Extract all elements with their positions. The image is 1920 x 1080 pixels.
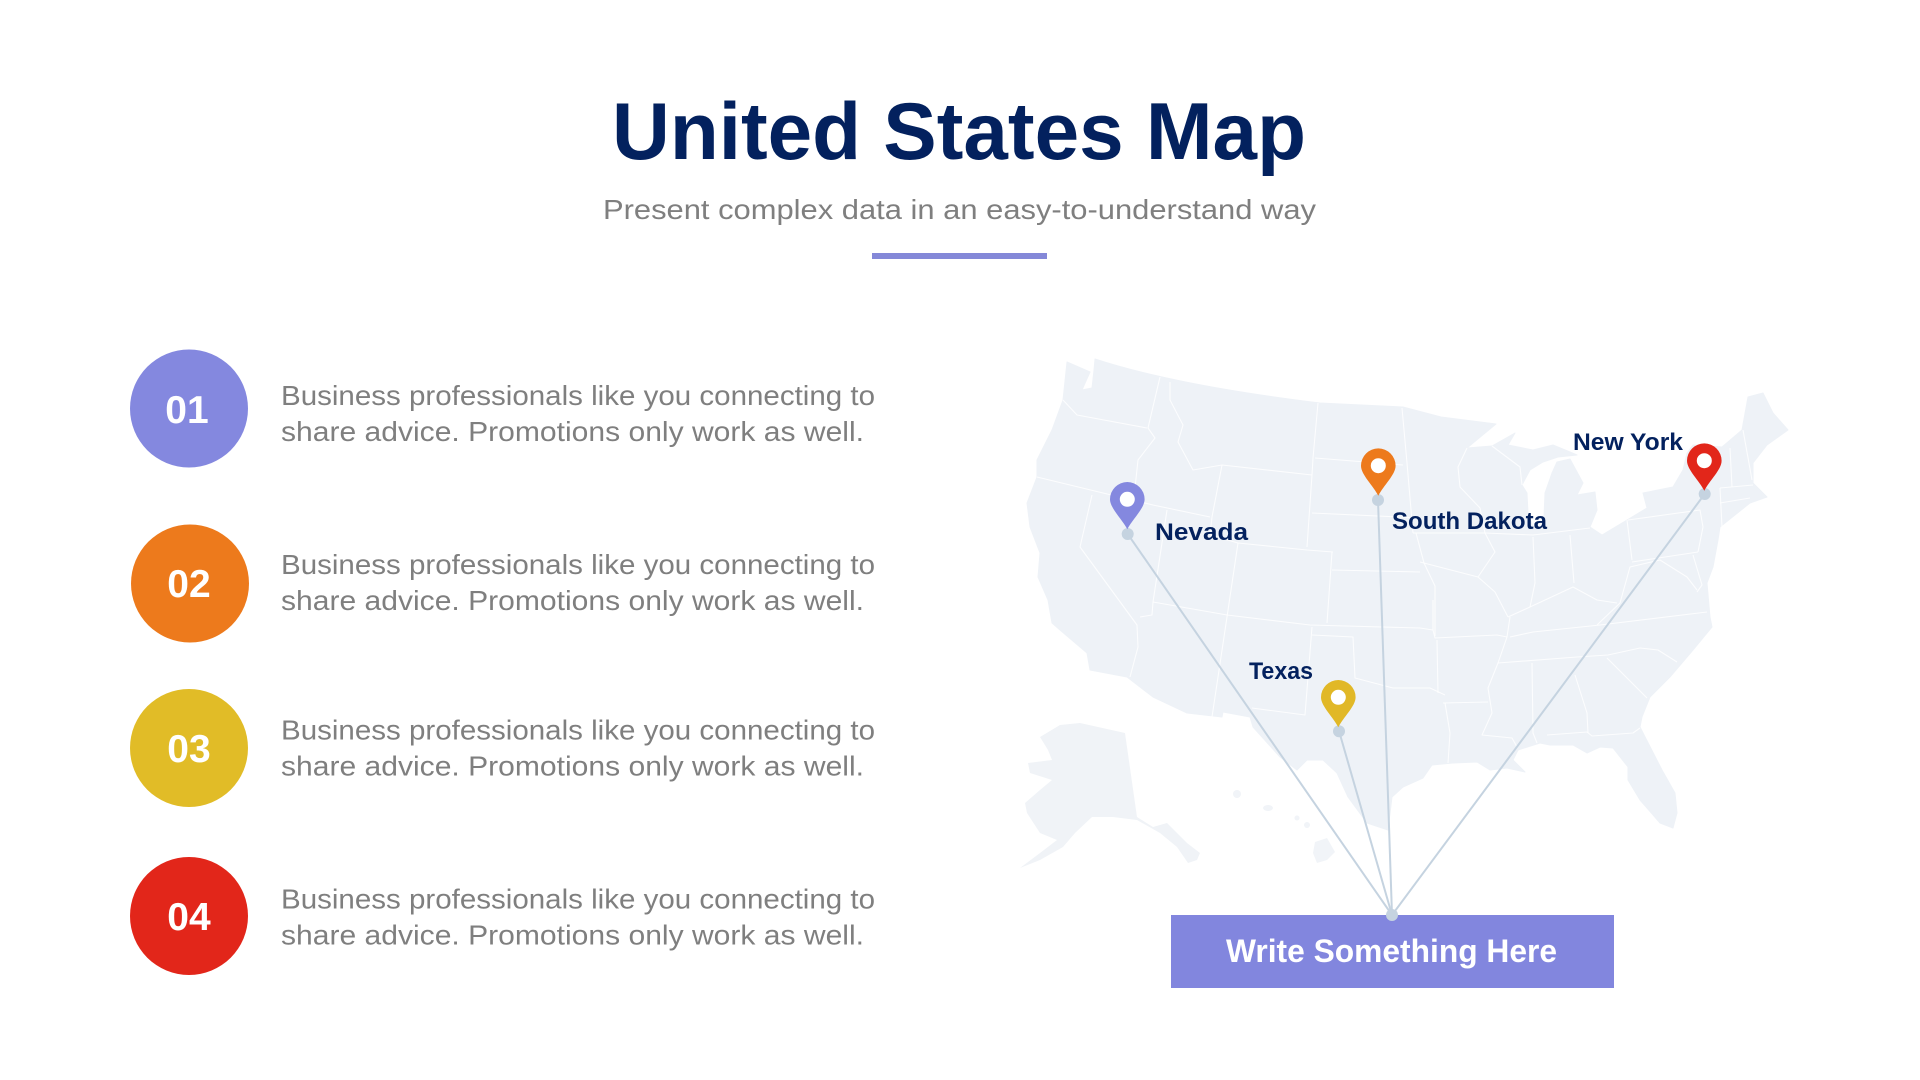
text 02: share advice. Promotions only work as well. (281, 585, 864, 616)
label: Nevada: Nevada (1155, 519, 1249, 546)
map of the United States (1020, 359, 1788, 868)
label: Texas: Texas (1249, 658, 1313, 685)
text 03: share advice. Promotions only work as well. (281, 750, 864, 782)
text 03 (281, 714, 875, 782)
title: United States Map (612, 87, 1306, 177)
text 04: share advice. Promotions only work as well. (281, 920, 864, 950)
contiguous states (1027, 359, 1788, 830)
call-to-action box (1171, 915, 1614, 988)
text 04 (281, 884, 875, 950)
connector lines (1128, 494, 1705, 915)
state borders (1037, 377, 1753, 763)
label: South Dakota: South Dakota (1392, 508, 1548, 535)
list item 02 (131, 524, 875, 642)
badge 02: 02 (167, 563, 211, 606)
text 01: share advice. Promotions only work as well. (281, 416, 864, 447)
text 04: Business professionals like you connecting to (281, 884, 875, 914)
badge 03 (130, 689, 248, 807)
list item 04 (130, 857, 875, 975)
text 02 (281, 549, 875, 616)
connector origin dot (1386, 909, 1398, 921)
pin: Texas (1321, 680, 1356, 737)
call-to-action box: Write Something Here (1226, 933, 1557, 969)
badge 02 (131, 524, 249, 642)
badge 01: 01 (165, 389, 209, 432)
text 02: Business professionals like you connecting to (281, 549, 875, 580)
list item 01 (130, 350, 875, 468)
text 01: Business professionals like you connecting to (281, 380, 875, 411)
text 01 (281, 380, 875, 447)
badge 01 (130, 350, 248, 468)
pin: South Dakota (1361, 448, 1396, 506)
pin: Nevada (1110, 482, 1145, 540)
badge 03: 03 (167, 728, 211, 771)
list item 03 (130, 689, 875, 807)
badge 04 (130, 857, 248, 975)
pin: New York (1687, 443, 1722, 500)
text 03: Business professionals like you connecting to (281, 714, 875, 746)
badge 04: 04 (167, 896, 211, 939)
Hawaii (1233, 790, 1335, 863)
label: New York: New York (1573, 429, 1684, 456)
subtitle: Present complex data in an easy-to-understand way (603, 194, 1316, 225)
title accent bar (872, 253, 1047, 259)
Alaska (1020, 723, 1200, 868)
